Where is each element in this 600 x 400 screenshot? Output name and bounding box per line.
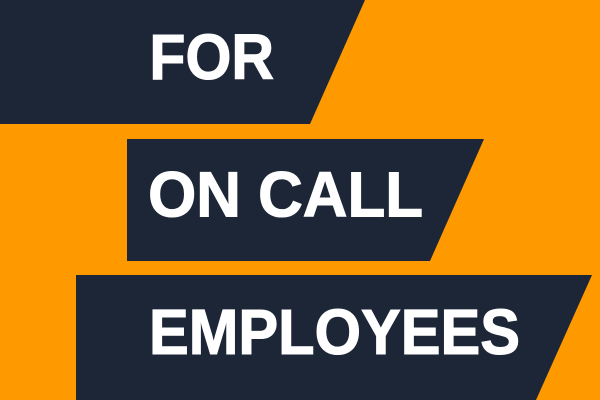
banner: EMPLOYEES: EMPLOYEES (149, 296, 520, 368)
banner: FOR (0, 0, 365, 124)
banner: FOR: FOR (149, 21, 274, 93)
banner: EMPLOYEES (76, 275, 592, 400)
banner: ON CALL (127, 139, 484, 261)
banner: ON CALL: ON CALL (148, 158, 423, 230)
